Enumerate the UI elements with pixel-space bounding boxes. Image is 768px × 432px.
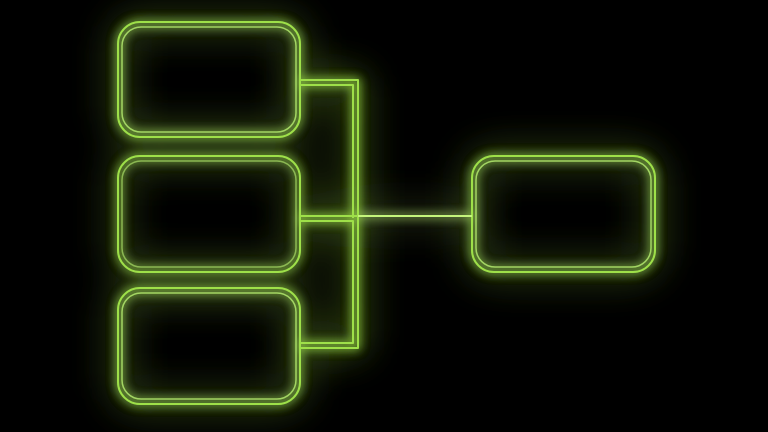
diagram <box>118 22 655 404</box>
box: bottom left <box>118 288 300 404</box>
connectors <box>300 80 472 348</box>
box: top left <box>118 22 300 137</box>
box: middle left <box>118 156 300 272</box>
box: right <box>472 156 655 272</box>
